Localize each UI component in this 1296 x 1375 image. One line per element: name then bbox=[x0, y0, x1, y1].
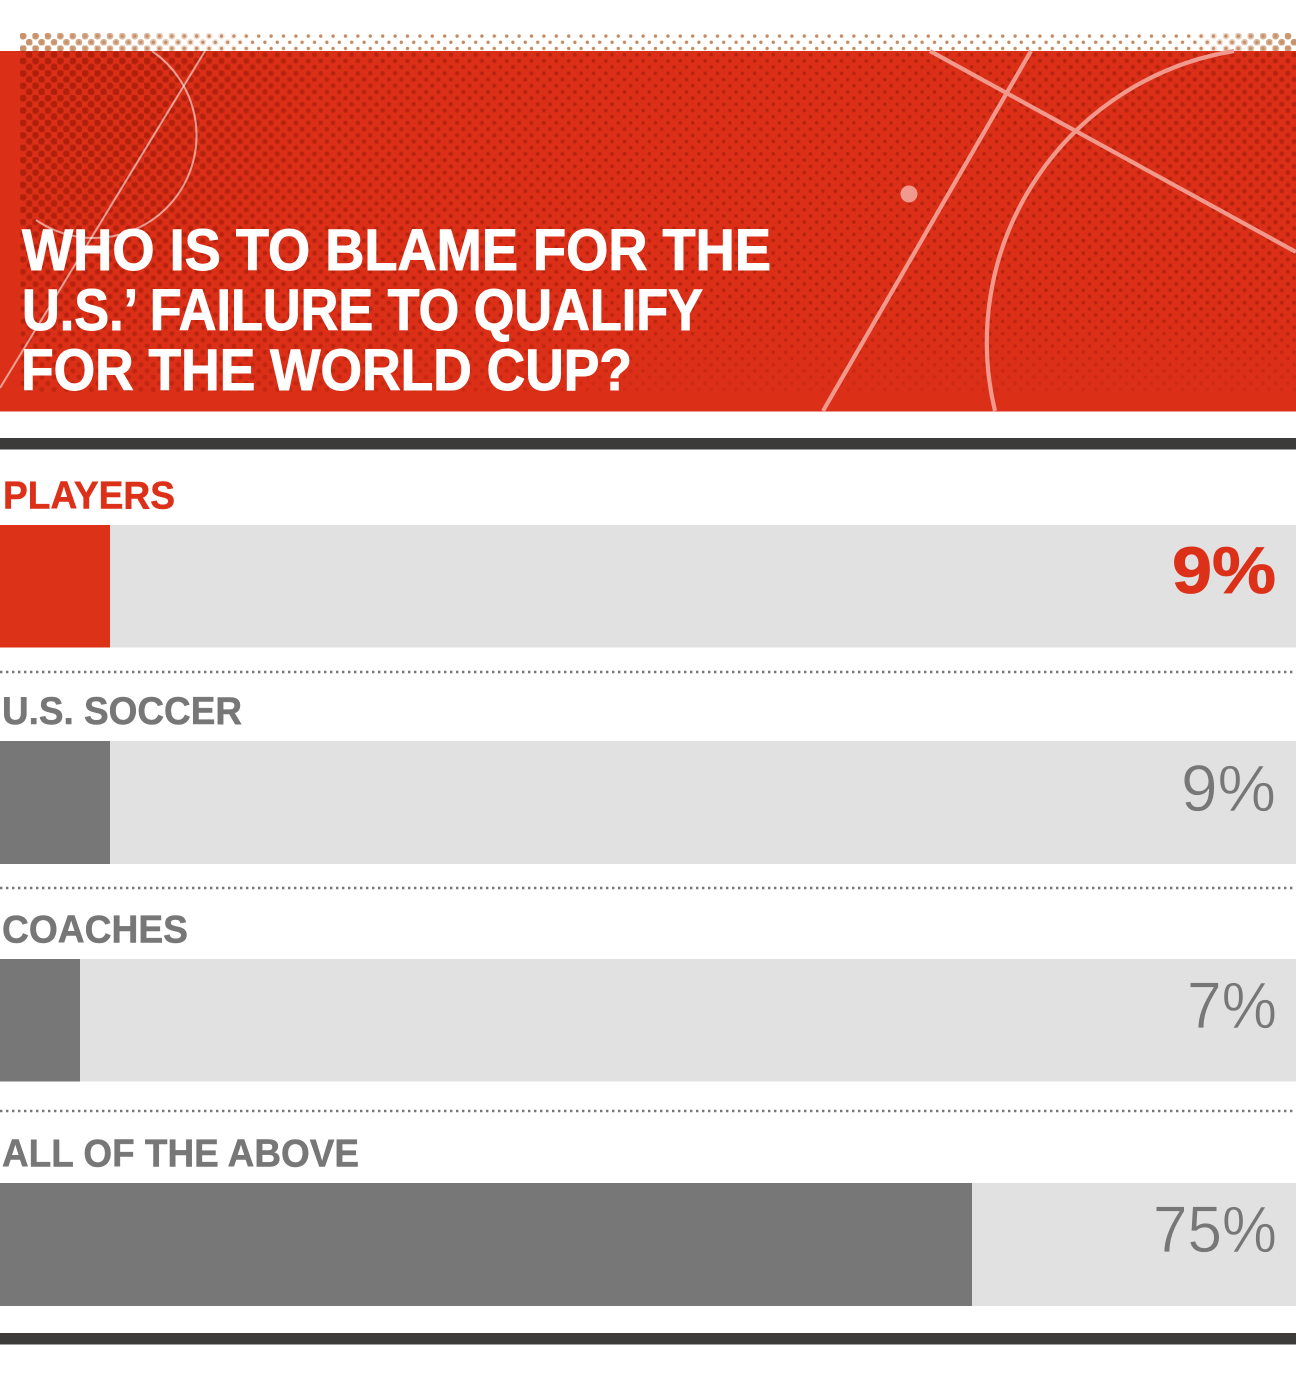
value: coaches: 7% bbox=[1187, 968, 1277, 1042]
label: coaches: COACHES bbox=[2, 908, 188, 952]
title bbox=[21, 218, 771, 403]
bar fill: all of the above 75% bbox=[0, 1183, 972, 1306]
row: U.S. Soccer bbox=[0, 690, 1296, 864]
title: FOR THE WORLD CUP? bbox=[21, 338, 632, 403]
row: coaches bbox=[0, 908, 1296, 1082]
header panel bbox=[0, 33, 1296, 412]
bar fill: players 9% bbox=[0, 525, 110, 648]
red background bbox=[0, 51, 1296, 412]
bar track: all of the above bbox=[0, 1183, 1296, 1306]
label: players: PLAYERS bbox=[3, 474, 175, 518]
row: players bbox=[0, 474, 1296, 648]
halftone band above header bbox=[20, 33, 1296, 51]
top rule bbox=[0, 438, 1296, 450]
label: all of the above: ALL OF THE ABOVE bbox=[2, 1132, 359, 1176]
pitch spot bbox=[900, 186, 918, 202]
value: all of the above: 75% bbox=[1153, 1192, 1277, 1266]
bar fill: coaches 7% bbox=[0, 959, 80, 1082]
bar track: players bbox=[0, 525, 1296, 648]
title: WHO IS TO BLAME FOR THE bbox=[22, 218, 771, 283]
bar track: U.S. Soccer bbox=[0, 741, 1296, 864]
pitch lines left bbox=[0, 51, 205, 388]
halftone shading bbox=[20, 51, 1296, 392]
bottom rule bbox=[0, 1333, 1296, 1344]
label: U.S. Soccer: U.S. SOCCER bbox=[2, 690, 242, 733]
row: all of the above bbox=[0, 1132, 1296, 1306]
value: U.S. Soccer: 9% bbox=[1181, 751, 1276, 825]
title: U.S.’ FAILURE TO QUALIFY bbox=[22, 278, 703, 343]
value: players: 9% bbox=[1172, 533, 1276, 607]
bar fill: U.S. Soccer 9% bbox=[0, 741, 110, 864]
bar track: coaches bbox=[0, 959, 1296, 1082]
pitch lines right bbox=[823, 51, 1296, 411]
